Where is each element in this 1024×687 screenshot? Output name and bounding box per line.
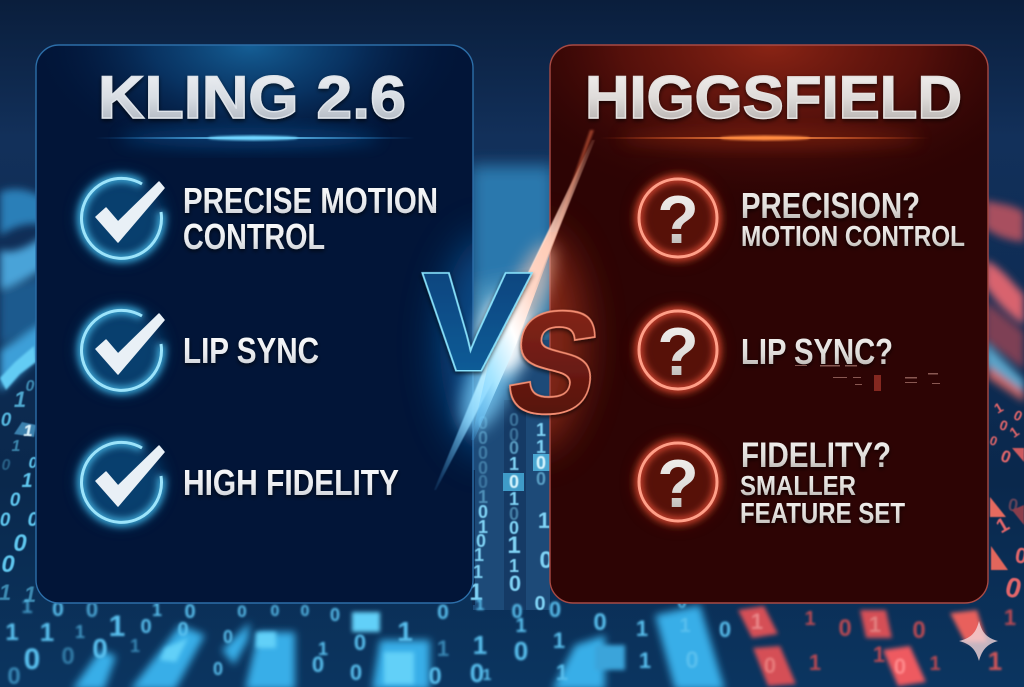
background: binary bottom strip blue: 1 bbox=[476, 597, 485, 614]
background: binary left edge: 0 bbox=[26, 378, 35, 395]
panel: Kling 2.6 bbox=[35, 44, 474, 604]
background: binary left edge: 0 bbox=[1, 551, 15, 578]
background: binary bottom strip blue: 0 bbox=[52, 598, 64, 621]
background: binary bottom strip blue: 0 bbox=[593, 609, 607, 636]
background: binary bottom strip blue: 1 bbox=[636, 616, 648, 641]
background: binary bottom strip blue: 1 bbox=[553, 628, 565, 653]
background: binary bottom strip blue: 0 bbox=[237, 602, 247, 621]
background: binary bottom strip blue: 0 bbox=[330, 605, 340, 625]
letter V: V bbox=[411, 244, 534, 400]
label: precise motion control bbox=[183, 180, 438, 257]
background: binary strip between panels: 1 bbox=[509, 489, 519, 509]
background: binary bottom strip blue: 0 bbox=[184, 601, 196, 623]
background: binary left edge: 1 bbox=[12, 438, 21, 455]
background: binary left edge: 1 bbox=[24, 582, 36, 607]
background: binary bottom strip blue: 0 bbox=[213, 659, 223, 679]
background: binary left edge bbox=[0, 378, 39, 607]
background: binary bottom strip blue: 1 bbox=[21, 596, 33, 618]
background: binary strip between panels: 0 bbox=[478, 428, 488, 448]
background: binary bottom strip blue: 1 bbox=[130, 636, 140, 656]
background: binary bottom strip blue: 1 bbox=[40, 617, 54, 647]
background: binary left edge: 1 bbox=[24, 423, 33, 440]
background: binary strip between panels: 0 bbox=[478, 443, 488, 463]
background: binary strip between panels: 0 bbox=[509, 504, 519, 524]
glitch artefacts bbox=[795, 365, 940, 391]
background: binary bottom strip blue: 1 bbox=[318, 639, 328, 659]
background: binary strip between panels: 0 bbox=[534, 593, 546, 615]
background: binary strip between panels: 0 bbox=[536, 453, 546, 473]
background: binary bottom strip blue: 0 bbox=[719, 617, 731, 642]
background: binary bottom strip red: 1 bbox=[804, 608, 816, 630]
icon: question mark lip sync: ? bbox=[657, 314, 699, 390]
heading: Higgsfield: HIGGSFIELD bbox=[585, 64, 962, 131]
background: binary right edge: 0 bbox=[998, 446, 1014, 467]
background: binary strip between panels: 1 bbox=[509, 556, 519, 576]
versus badge bbox=[411, 140, 610, 490]
label: precise motion control: PRECISE MOTION bbox=[183, 180, 438, 221]
background: binary right edge: 1 bbox=[1006, 423, 1022, 441]
background: binary bottom strip blue: 1 bbox=[556, 660, 568, 685]
label: fidelity? smaller feature set: FIDELITY? bbox=[741, 436, 891, 475]
icon: question mark precision bbox=[636, 176, 720, 260]
background: binary bottom strip blue: 0 bbox=[354, 630, 366, 655]
divider glow line bbox=[600, 136, 930, 140]
label: fidelity? smaller feature set: FEATURE SET bbox=[740, 498, 905, 530]
background: binary bottom strip blue: 0 bbox=[177, 619, 189, 641]
background: binary strip between panels: 1 bbox=[509, 454, 519, 474]
background: binary strip between panels: 0 bbox=[478, 472, 488, 492]
background: binary strip between panels: 0 bbox=[509, 472, 519, 492]
background: binary bottom strip blue: 0 bbox=[312, 652, 324, 677]
background: binary bottom strip red: 1 bbox=[988, 646, 1002, 676]
heading: Kling 2.6: KLING 2.6 bbox=[98, 64, 406, 131]
background: binary strip between panels: 1 bbox=[473, 562, 483, 582]
background: binary bottom strip red: 1 bbox=[869, 612, 881, 637]
divider glow line bbox=[95, 136, 415, 140]
background: binary left edge: 0 bbox=[27, 509, 39, 531]
background: binary strip between panels: 0 bbox=[509, 438, 519, 458]
background: binary strip between panels: 0 bbox=[539, 547, 553, 574]
background: binary bottom strip blue: 1 bbox=[109, 610, 125, 643]
background: binary left edge: 0 bbox=[0, 510, 11, 531]
label: fidelity? smaller feature set: SMALLER bbox=[740, 470, 856, 501]
background: binary strip between panels: 1 bbox=[469, 579, 483, 606]
background: binary left edge: 0 bbox=[13, 530, 27, 557]
background: binary bottom strip blue: 0 bbox=[678, 595, 687, 612]
background: binary left edge: 1 bbox=[21, 470, 33, 492]
background: glowing data waves bbox=[0, 165, 1024, 402]
background: binary right edge: 0 bbox=[988, 432, 1000, 449]
background: binary bottom strip blue: 0 bbox=[350, 660, 362, 685]
background: binary strip between panels: 0 bbox=[536, 469, 546, 489]
background: binary bottom strip blue: 1 bbox=[5, 619, 19, 646]
panel: Higgsfield bbox=[549, 44, 989, 604]
label: precision? motion control: MOTION CONTROL bbox=[741, 221, 965, 253]
background: binary bottom strip red: 0 bbox=[912, 617, 926, 644]
background: binary bottom strip blue: 0 bbox=[514, 636, 528, 666]
background: binary bottom strip blue: 1 bbox=[437, 636, 449, 661]
background: binary strip between panels: 0 bbox=[509, 425, 519, 445]
background: binary strip between panels: 0 bbox=[509, 410, 519, 430]
icon: check mark precise motion bbox=[79, 176, 164, 260]
background: binary left edge: 0 bbox=[29, 455, 38, 472]
letter S: S bbox=[498, 283, 610, 443]
background: binary bottom strip red: 0 bbox=[838, 615, 852, 642]
background: binary strip between panels: 0 bbox=[478, 458, 488, 478]
background: binary bottom strip blue: 1 bbox=[152, 600, 162, 620]
background: binary strip between panels: 1 bbox=[474, 545, 484, 565]
background: binary right edge: 1 bbox=[991, 399, 1006, 417]
background: binary bottom strip blue: 1 bbox=[639, 648, 651, 673]
background: binary bottom strip blue: 1 bbox=[483, 667, 492, 684]
background: binary strip between panels: 1 bbox=[538, 508, 550, 533]
background: binary strip between panels: 1 bbox=[478, 487, 488, 507]
background: binary strip between panels: 1 bbox=[536, 437, 546, 457]
background: binary strip between panels: 0 bbox=[509, 518, 519, 538]
background: binary bottom strip blue: 0 bbox=[223, 627, 233, 647]
label: fidelity? smaller feature set bbox=[740, 436, 905, 530]
background: binary bottom strip blue: 0 bbox=[301, 603, 310, 620]
background: binary strip between panels: 1 bbox=[478, 517, 488, 537]
icon: question mark lip sync bbox=[636, 308, 720, 392]
background: binary left edge: 1 bbox=[14, 387, 26, 412]
background: binary bottom strip blue bbox=[5, 595, 731, 687]
lightning slash bbox=[434, 140, 595, 490]
icon: question mark precision: ? bbox=[657, 182, 699, 258]
icon: question mark fidelity bbox=[636, 440, 720, 524]
label: precise motion control: CONTROL bbox=[183, 216, 325, 257]
background: binary strip between panels bbox=[469, 340, 553, 615]
background: binary strip between panels: 1 bbox=[536, 420, 546, 440]
background: binary bottom strip blue: 1 bbox=[397, 616, 413, 647]
label: lip sync?: LIP SYNC? bbox=[741, 331, 893, 372]
background: binary bottom strip red: 1 bbox=[751, 609, 763, 634]
background: binary bottom strip blue: 0 bbox=[86, 597, 98, 622]
background: binary bottom strip blue: 0 bbox=[140, 616, 152, 638]
background: binary bottom strip blue: 0 bbox=[92, 633, 108, 664]
background: binary strip between panels: 0 bbox=[478, 413, 488, 433]
label: precision? motion control bbox=[741, 185, 965, 253]
background: binary left edge: 0 bbox=[10, 490, 21, 511]
icon: question mark fidelity: ? bbox=[657, 446, 699, 522]
background: binary bottom strip blue: 0 bbox=[271, 603, 280, 620]
background: binary bottom strip red: 1 bbox=[929, 653, 941, 675]
background: binary bottom strip blue: 1 bbox=[515, 615, 527, 637]
background: binary bottom strip red: 0 bbox=[894, 654, 906, 679]
label: high fidelity: HIGH FIDELITY bbox=[183, 462, 399, 503]
background: binary bottom strip blue: 0 bbox=[511, 601, 523, 623]
background: binary bottom strip red: 0 bbox=[764, 653, 776, 678]
background: binary strip between panels: 1 bbox=[507, 532, 521, 559]
background: binary strip between panels: 0 bbox=[478, 502, 488, 522]
background: binary bottom strip blue: 0 bbox=[549, 597, 561, 622]
label: precision? motion control: PRECISION? bbox=[741, 185, 920, 226]
background: binary left edge: 0 bbox=[1, 410, 12, 431]
background: binary right edge bbox=[988, 399, 1024, 605]
background: binary bottom strip red bbox=[738, 605, 1016, 686]
icon: sparkle watermark bbox=[959, 621, 998, 661]
background: binary strip between panels: 0 bbox=[509, 571, 521, 596]
background: binary bottom strip blue: 0 bbox=[24, 643, 40, 676]
background: binary strip between panels: 0 bbox=[476, 531, 486, 551]
icon: check mark lip sync bbox=[79, 308, 164, 392]
background: binary right edge: 0 bbox=[1006, 494, 1020, 516]
icon: check mark high fidelity bbox=[79, 440, 164, 524]
background: binary bottom strip blue: 1 bbox=[679, 615, 691, 637]
background: binary bottom strip blue: 0 bbox=[61, 643, 75, 670]
background: binary bottom strip blue: 1 bbox=[75, 622, 85, 642]
label: lip sync: LIP SYNC bbox=[183, 330, 319, 371]
background: binary bottom strip blue: 0 bbox=[437, 601, 449, 624]
background: binary bottom strip red: 1 bbox=[873, 642, 885, 667]
background: binary right edge: 1 bbox=[993, 513, 1013, 538]
background: binary bottom strip blue: 1 bbox=[473, 630, 487, 660]
background: binary right edge: 0 bbox=[997, 416, 1010, 434]
background: binary bottom strip red: 1 bbox=[1004, 605, 1016, 630]
background: binary bottom strip red: 1 bbox=[809, 650, 821, 675]
background: binary left edge: 0 bbox=[2, 457, 11, 474]
background: binary bottom strip blue: 0 bbox=[685, 647, 699, 674]
